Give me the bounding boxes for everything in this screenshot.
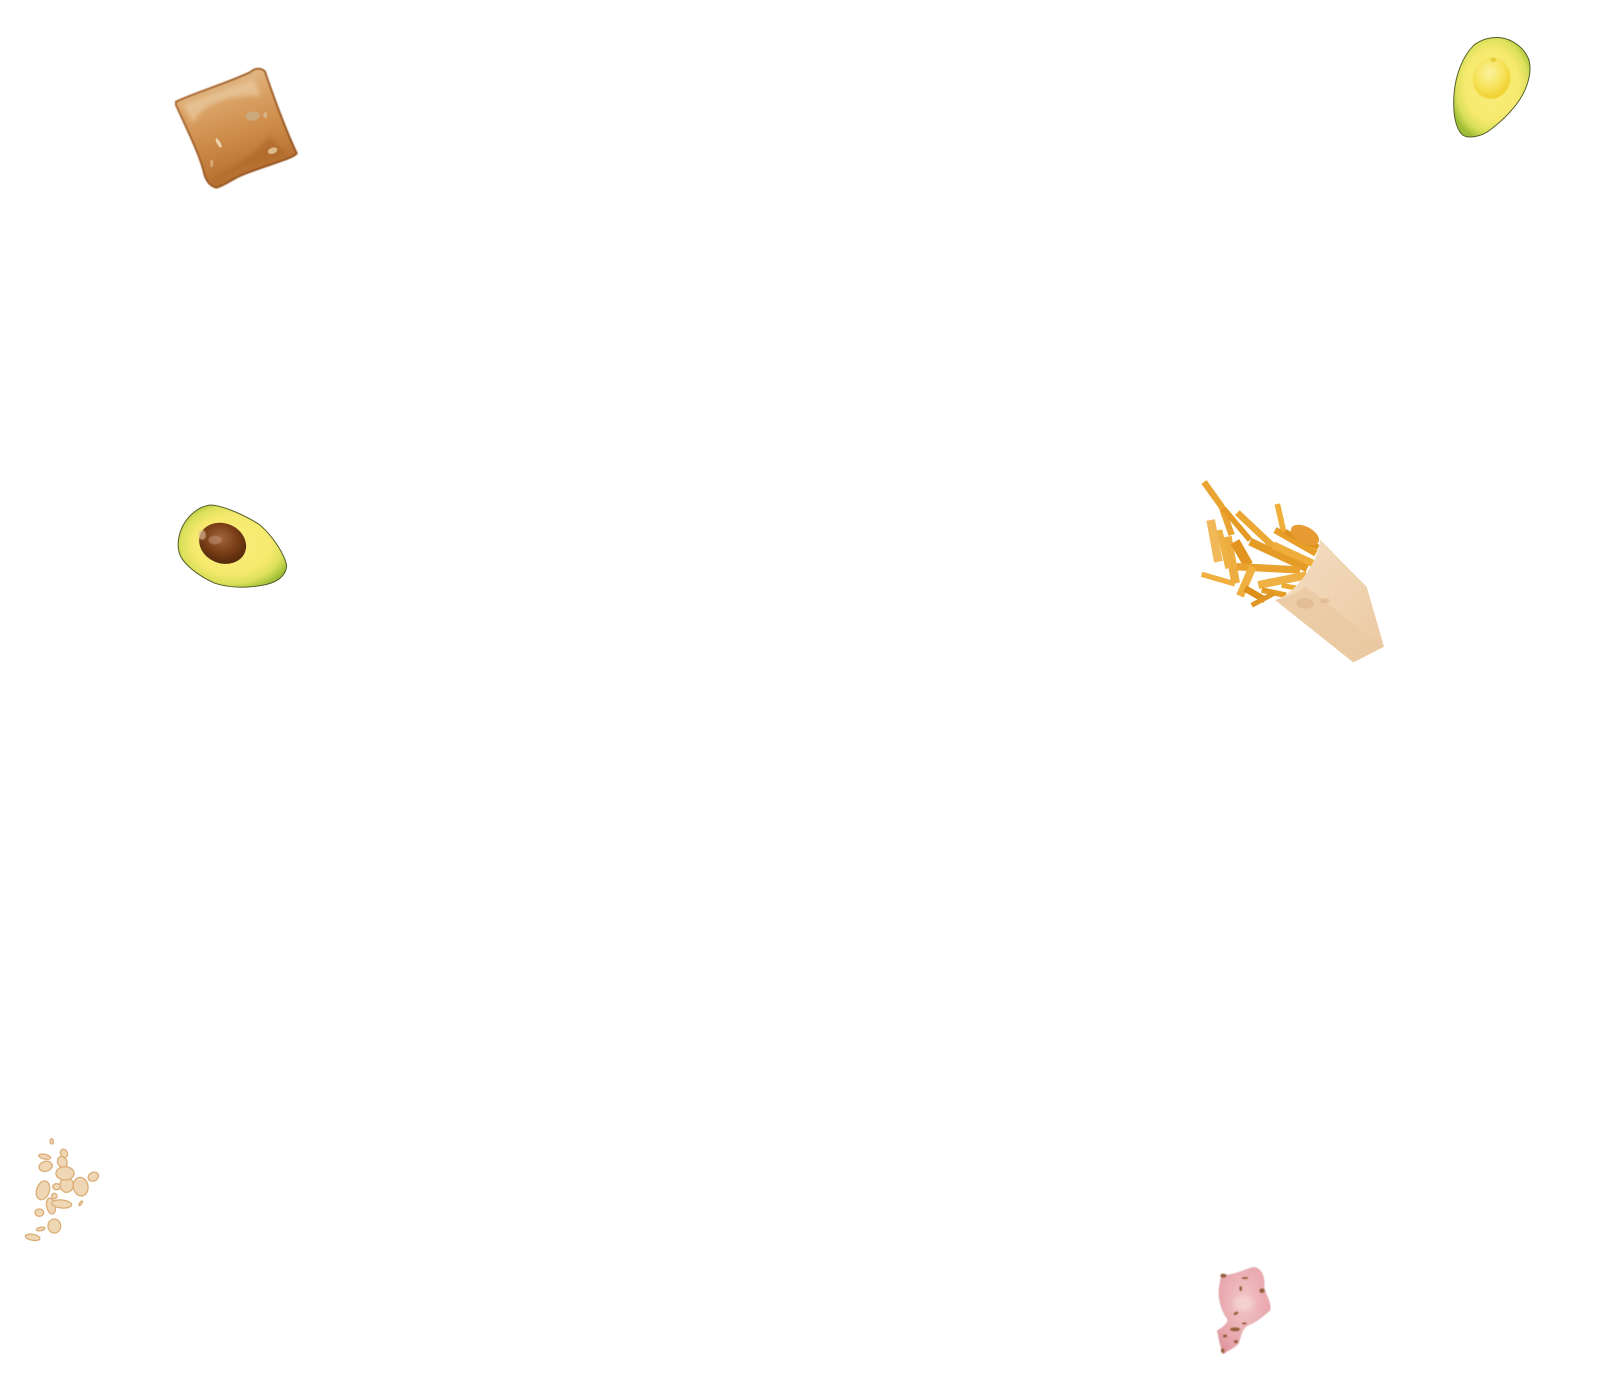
- icon: avocado half with pit: [178, 505, 287, 587]
- icon: toast slice: [176, 69, 297, 188]
- icon: french fries in paper bag: [1202, 482, 1384, 662]
- icon: avocado half without pit: [1454, 38, 1530, 137]
- fries: [1202, 482, 1318, 605]
- paper bag: [1275, 539, 1384, 662]
- icon: oat flakes: [25, 1139, 100, 1242]
- icon: bacon piece: [1217, 1267, 1270, 1354]
